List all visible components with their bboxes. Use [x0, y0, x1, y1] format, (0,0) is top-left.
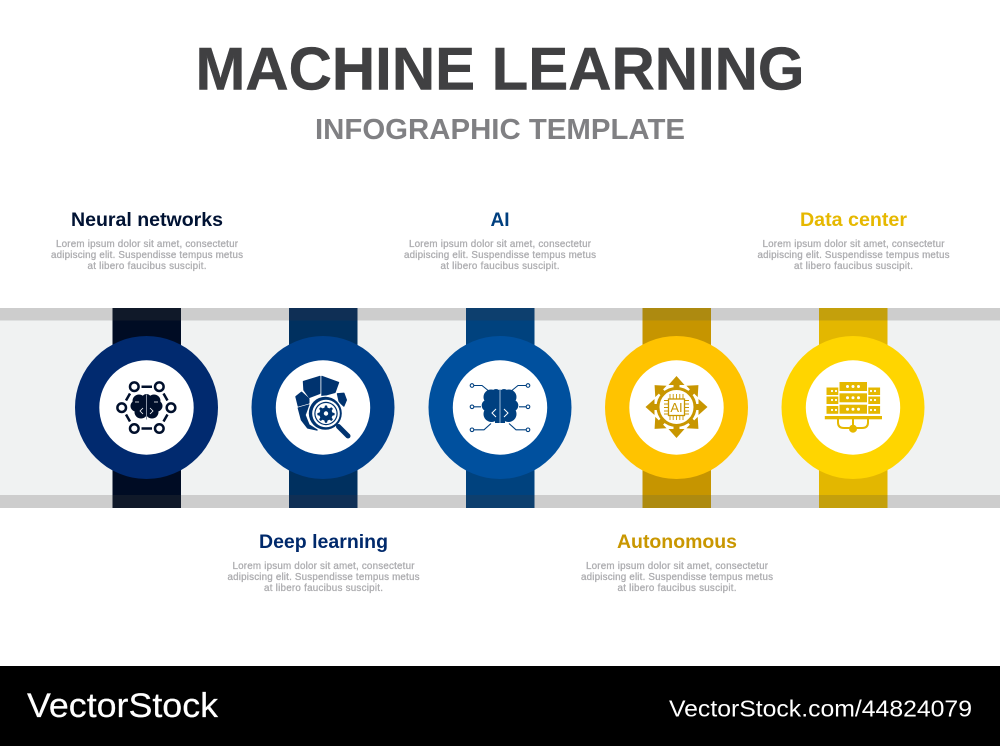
- description: Lorem ipsum dolor sit amet, consectetur: [56, 239, 239, 250]
- horizontal band: [0, 308, 1000, 508]
- description: Lorem ipsum dolor sit amet, consectetur: [762, 239, 945, 250]
- description: [581, 561, 773, 594]
- text block: deep learning: [228, 532, 420, 594]
- ring 4: [605, 336, 748, 479]
- description: at libero faucibus suscipit.: [618, 583, 736, 594]
- vertical strip 1: [112, 308, 181, 508]
- icon: brain with gear magnifier: [296, 376, 348, 436]
- vertical strip 2: [289, 308, 358, 508]
- description: adipiscing elit. Suspendisse tempus metus: [581, 572, 773, 583]
- panel: AI: [428, 308, 572, 508]
- description: Lorem ipsum dolor sit amet, consectetur: [232, 561, 415, 572]
- panel: autonomous: [605, 308, 748, 508]
- heading: Data center: [800, 210, 908, 231]
- text block: neural networks: [51, 210, 243, 272]
- icon: brain circuit: [470, 384, 530, 432]
- description: [404, 239, 596, 272]
- vertical strip 4: [642, 308, 711, 508]
- description: adipiscing elit. Suspendisse tempus metus: [404, 250, 596, 261]
- description: adipiscing elit. Suspendisse tempus metus: [228, 572, 420, 583]
- description: adipiscing elit. Suspendisse tempus metus: [758, 250, 950, 261]
- description: [51, 239, 243, 272]
- icon: server racks: [825, 382, 882, 433]
- title: MACHINE LEARNING: [196, 36, 804, 102]
- vertical strip 5: [819, 308, 888, 508]
- icon: AI chip with arrows: AI: [670, 400, 683, 415]
- text block: AI: [404, 210, 596, 272]
- footer url: VectorStock.com/44824079: [669, 696, 972, 722]
- panel: data center: [782, 308, 924, 508]
- description: at libero faucibus suscipit.: [264, 583, 383, 594]
- icon: AI chip with arrows: [646, 376, 708, 438]
- description: at libero faucibus suscipit.: [88, 261, 206, 272]
- ring 1: [75, 336, 218, 479]
- heading: Deep learning: [259, 532, 388, 553]
- ring 3: [428, 336, 572, 479]
- description: Lorem ipsum dolor sit amet, consectetur: [409, 239, 592, 250]
- heading: AI: [490, 210, 510, 231]
- panel: neural networks: [75, 308, 218, 508]
- footer logo: VectorStock: [27, 687, 219, 725]
- ring 2: [252, 336, 394, 479]
- heading: Neural networks: [71, 210, 223, 231]
- text block: data center: [758, 210, 950, 272]
- description: [228, 561, 420, 594]
- description: [758, 239, 950, 272]
- text block: autonomous: [581, 532, 773, 594]
- description: at libero faucibus suscipit.: [794, 261, 913, 272]
- ring 5: [782, 336, 924, 479]
- subtitle: INFOGRAPHIC TEMPLATE: [315, 114, 685, 146]
- vertical strip 3: [466, 308, 534, 508]
- heading: Autonomous: [617, 532, 737, 553]
- icon: brain network: [117, 382, 175, 433]
- panel: deep learning: [252, 308, 394, 508]
- footer bar: [0, 666, 1000, 746]
- description: at libero faucibus suscipit.: [440, 261, 560, 272]
- description: adipiscing elit. Suspendisse tempus metus: [51, 250, 243, 261]
- description: Lorem ipsum dolor sit amet, consectetur: [586, 561, 769, 572]
